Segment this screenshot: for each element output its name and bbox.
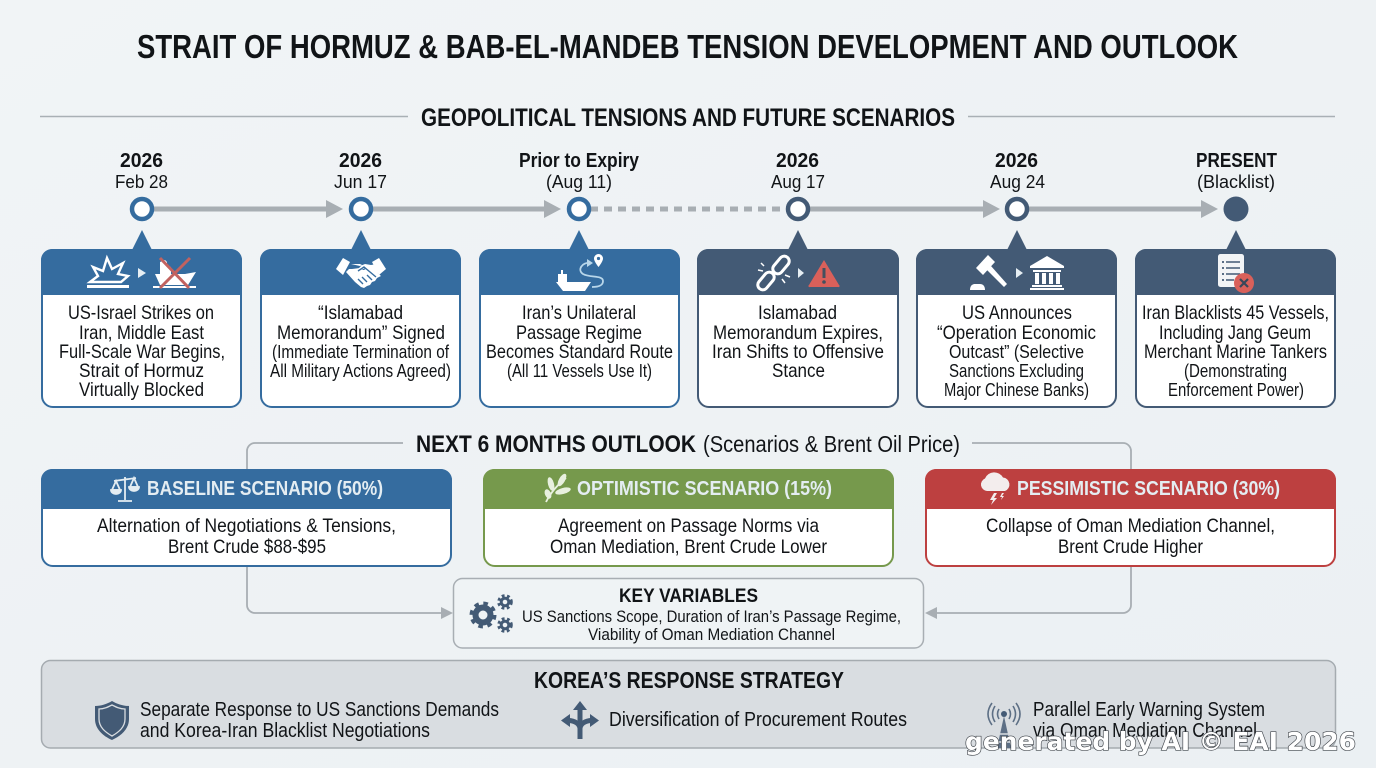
icon: shield (95, 701, 129, 740)
strategy text: early warning: via Oman Mediation Channel (1033, 720, 1257, 742)
panel: Iran blacklists vessels (1135, 230, 1336, 407)
strategy text: early warning (1033, 699, 1265, 742)
panel: Korea's response strategy: KOREA’S RESPONSE STRATEGY (534, 667, 844, 693)
timeline node: Aug 17: 2026 (776, 149, 819, 172)
icon: handshake (336, 258, 386, 288)
scenario text (97, 515, 396, 558)
card text: “Operation Economic (937, 322, 1096, 344)
scenario text (986, 515, 1275, 558)
timeline node: Prior to Expiry: Prior to Expiry (519, 149, 640, 172)
card text: All Military Actions Agreed) (270, 361, 451, 381)
panel: Operation Economic Outcast (916, 230, 1117, 407)
section heading: geopolitical tensions: GEOPOLITICAL TENSIONS AND FUTURE SCENARIOS (421, 104, 955, 132)
card text: Memorandum Expires, (713, 322, 883, 344)
timeline node: Jun 17: Jun 17 (334, 171, 387, 192)
card text (59, 302, 225, 401)
panel: US-Israel strikes (41, 230, 242, 407)
icon: storm cloud (981, 472, 1009, 505)
timeline node: Jun 17: 2026 (339, 149, 382, 172)
timeline node: Aug 24: Aug 24 (990, 171, 1045, 192)
timeline node: Present: PRESENT (1196, 149, 1277, 172)
timeline node: Aug 24 (990, 149, 1045, 219)
icon: gears (472, 596, 511, 631)
card text: “Islamabad (318, 302, 403, 324)
scenario text (550, 515, 827, 558)
card text (937, 302, 1096, 400)
heading: next 6 months outlook: NEXT 6 MONTHS OUTLOOK (416, 431, 697, 458)
card text: Stance (772, 360, 825, 382)
timeline node: Aug 24: 2026 (995, 149, 1038, 172)
panel: Korea's response strategy (42, 660, 1336, 748)
strategy text: procurement routes: Diversification of Procurement Routes (609, 709, 907, 731)
card text: US Announces (962, 302, 1072, 324)
icon: scales (111, 477, 139, 501)
icon: broken chain and warning (756, 254, 840, 292)
card text: Iran, Middle East (79, 322, 204, 344)
card text: Iran Shifts to Offensive (712, 341, 884, 363)
timeline node: Prior to Expiry (519, 149, 640, 219)
card text: (Immediate Termination of (272, 342, 450, 362)
scenario text: Alternation of Negotiations & Tensions, (97, 515, 396, 537)
panel: Islamabad Memorandum expires (697, 230, 899, 407)
panel: key variables: Viability of Oman Mediation Channel (588, 625, 835, 644)
icon: gavel and bank (970, 255, 1064, 290)
card text: Strait of Hormuz (79, 360, 204, 382)
timeline node: Prior to Expiry: (Aug 11) (546, 171, 612, 192)
scenario text: Oman Mediation, Brent Crude Lower (550, 536, 827, 558)
scenario text: Brent Crude Higher (1058, 536, 1203, 558)
timeline node: Feb 28: 2026 (120, 149, 163, 172)
panel: Iran's unilateral passage regime (479, 230, 680, 407)
timeline node: Aug 17: Aug 17 (771, 171, 825, 192)
timeline node: Jun 17 (334, 149, 387, 219)
panel: optimistic scenario (483, 469, 894, 566)
card text (712, 302, 884, 382)
card text: Virtually Blocked (79, 379, 204, 401)
panel: baseline scenario: BASELINE SCENARIO (50%) (147, 478, 383, 500)
strategy text: early warning: Parallel Early Warning System (1033, 699, 1265, 721)
scenario text: Collapse of Oman Mediation Channel, (986, 515, 1275, 537)
panel: key variables (454, 578, 924, 648)
timeline node: Present (1196, 149, 1277, 222)
timeline node: Present: (Blacklist) (1197, 171, 1275, 192)
icon: signal tower (988, 703, 1020, 748)
scenario text: Brent Crude $88-$95 (168, 536, 326, 558)
icon: ship and route (556, 254, 603, 291)
icon: olive branch (543, 472, 572, 502)
strategy text: separate response (140, 699, 499, 742)
card text: Full-Scale War Begins, (59, 341, 225, 363)
heading: next 6 months outlook: (Scenarios & Brent Oil Price) (703, 431, 960, 457)
connector lines to key variables (247, 443, 1131, 619)
icon: explosion and blocked ship (87, 258, 196, 288)
card text: Becomes Standard Route (486, 341, 673, 363)
card text (1142, 302, 1329, 400)
watermark: generated by AI © EAI 2026 (965, 727, 1356, 756)
card text: Enforcement Power) (1168, 380, 1304, 400)
strategy text: separate response: Separate Response to US Sanctions Demands (140, 699, 499, 721)
card text: Islamabad (758, 302, 837, 324)
scenario text: Agreement on Passage Norms via (558, 515, 819, 537)
panel: optimistic scenario: OPTIMISTIC SCENARIO (15%) (577, 478, 832, 500)
card text: Outcast” (Selective (949, 342, 1084, 362)
panel: baseline scenario (41, 469, 452, 566)
card text: (Demonstrating (1184, 361, 1287, 381)
card text: Sanctions Excluding (949, 361, 1084, 381)
card text (270, 302, 451, 381)
card text: Merchant Marine Tankers (1144, 341, 1327, 363)
icon: diverging route arrows (561, 701, 599, 739)
card text: Memorandum” Signed (277, 322, 445, 344)
panel: key variables: US Sanctions Scope, Duration of Iran’s Passage Regime, (522, 607, 901, 626)
panel: Islamabad Memorandum signed (260, 230, 461, 407)
panel: pessimistic scenario (925, 469, 1336, 566)
timeline axis with arrows (150, 200, 1218, 218)
icon: blacklist document (1218, 254, 1254, 293)
timeline node: Aug 17 (771, 149, 825, 219)
panel: pessimistic scenario: PESSIMISTIC SCENARIO (30%) (1017, 478, 1280, 500)
card text (486, 302, 673, 381)
timeline node: Feb 28: Feb 28 (115, 171, 168, 192)
strategy text: separate response: and Korea-Iran Blacklist Negotiations (140, 720, 430, 742)
card text: Major Chinese Banks) (944, 380, 1089, 400)
card text: Passage Regime (516, 322, 642, 344)
card text: US-Israel Strikes on (68, 302, 214, 324)
card text: (All 11 Vessels Use It) (507, 361, 652, 381)
heading: next 6 months outlook (416, 431, 960, 458)
timeline node: Feb 28 (115, 149, 168, 219)
card text: Iran’s Unilateral (522, 302, 636, 324)
panel: key variables: KEY VARIABLES (619, 585, 758, 607)
card text: Iran Blacklists 45 Vessels, (1142, 302, 1329, 324)
card text: Including Jang Geum (1159, 322, 1311, 344)
